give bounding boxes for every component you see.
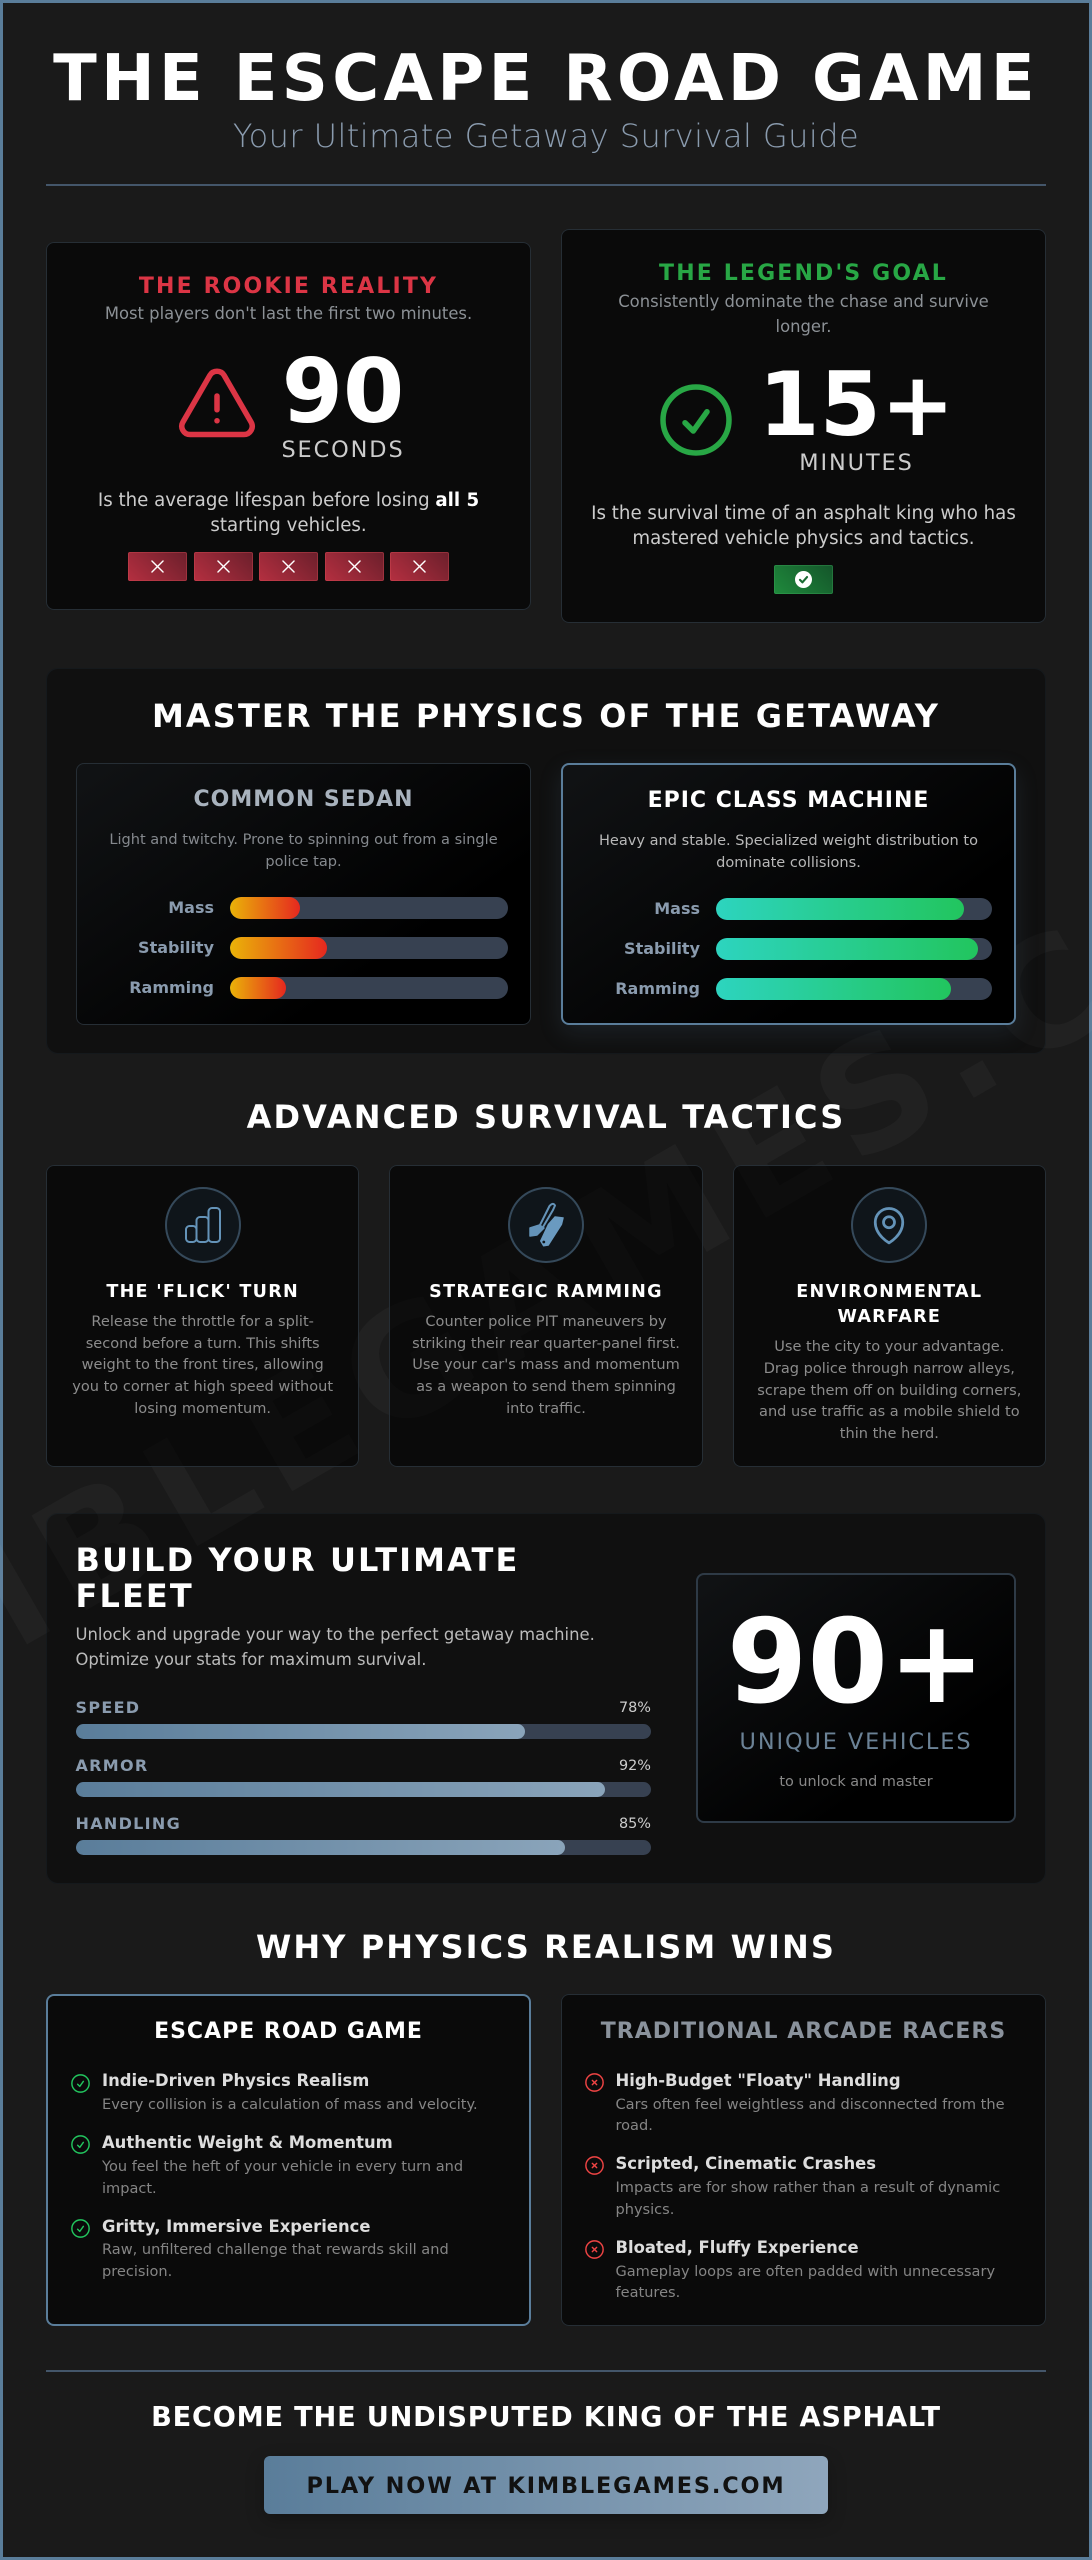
item description	[616, 2263, 995, 2301]
icon: bars	[165, 1187, 241, 1263]
item description: road.	[616, 2117, 653, 2134]
text: sedan description	[109, 831, 498, 870]
icon: check circle	[660, 384, 732, 456]
icon: wrench and screwdriver	[508, 1187, 584, 1263]
icon: surviving vehicle	[774, 565, 833, 594]
stat: armor: 92%	[619, 1758, 651, 1774]
text: flick turn: weight to the front tires, allowing	[82, 1356, 324, 1373]
heading: escape road game: ESCAPE ROAD GAME	[154, 2019, 423, 2044]
item title: Authentic Weight & Momentum	[102, 2133, 393, 2152]
text: legend description: mastered vehicle physics and tactics.	[632, 528, 975, 549]
stat row: ramming: Ramming	[129, 978, 214, 997]
heading: epic class machine: EPIC CLASS MACHINE	[648, 788, 929, 813]
heading: environmental warfare: ENVIRONMENTAL	[796, 1282, 982, 1302]
text: flick turn	[72, 1313, 333, 1417]
text: fleet description	[76, 1625, 595, 1669]
item description	[102, 2158, 463, 2197]
stat: speed: SPEED	[76, 1698, 140, 1717]
stat row: mass: Mass	[168, 898, 214, 917]
stat: handling: 85%	[619, 1816, 651, 1832]
list item: physics realism	[71, 2071, 478, 2113]
heading: fleet	[76, 1541, 519, 1615]
panel: master the physics	[46, 668, 1046, 1054]
text: flick turn: losing momentum.	[134, 1400, 271, 1417]
item description: physics.	[616, 2201, 674, 2218]
stat: handling: HANDLING	[76, 1814, 181, 1833]
stat unit: minutes: MINUTES	[799, 450, 914, 476]
stat row: mass	[654, 898, 992, 920]
stat: speed	[76, 1698, 651, 1739]
heading: environmental warfare	[796, 1282, 982, 1327]
heading: physics: MASTER THE PHYSICS OF THE GETAWAY	[152, 696, 940, 734]
stat: armor: ARMOR	[76, 1756, 149, 1775]
heading: traditional arcade racers: TRADITIONAL ARCADE RACERS	[601, 2019, 1006, 2044]
text: environmental warfare: scrape them off on building corners,	[757, 1382, 1021, 1399]
text: legend subtitle	[618, 292, 989, 336]
heading: legend's goal: THE LEGEND'S GOAL	[659, 261, 948, 286]
item description: Raw, unfiltered challenge that rewards skill and	[102, 2241, 449, 2258]
text: sedan description: Light and twitchy. Prone to spinning out from a single	[109, 831, 498, 848]
text: environmental warfare: Use the city to your advantage.	[774, 1338, 1004, 1355]
stat: armor	[76, 1756, 651, 1797]
text: strategic ramming: Counter police PIT maneuvers by	[425, 1313, 667, 1330]
text: strategic ramming: striking their rear quarter-panel first.	[412, 1335, 680, 1352]
text: fleet description: Unlock and upgrade your way to the perfect getaway machine.	[76, 1625, 595, 1644]
text: rookie description: Is the average lifespan before losing all 5	[98, 490, 479, 511]
lost vehicle 4	[324, 552, 384, 581]
text: environmental warfare: Drag police through narrow alleys,	[764, 1360, 1015, 1377]
icon: check	[71, 2219, 90, 2238]
text: environmental warfare: thin the herd.	[840, 1425, 939, 1442]
list item: cinematic crashes	[585, 2154, 1000, 2218]
stat row: ramming	[129, 977, 508, 999]
heading: fleet: FLEET	[76, 1577, 194, 1615]
button: play now	[264, 2456, 828, 2514]
panel: build your ultimate fleet	[46, 1513, 1046, 1884]
icon: check	[71, 2074, 90, 2093]
heading: common sedan: COMMON SEDAN	[194, 787, 413, 812]
stat: handling	[76, 1814, 651, 1855]
text: legend description	[591, 503, 1016, 549]
stat: 15+: 15+	[758, 353, 955, 456]
text: rookie description: starting vehicles.	[210, 515, 367, 536]
item description: features.	[616, 2284, 680, 2301]
text: legend subtitle: longer.	[776, 317, 831, 336]
icon: map pin	[851, 1187, 927, 1263]
label: unique vehicles: UNIQUE VEHICLES	[740, 1729, 972, 1755]
lost vehicle 2	[194, 552, 252, 581]
stat row: mass: Mass	[654, 899, 700, 918]
text: epic description: Heavy and stable. Specialized weight distribution to	[599, 832, 978, 849]
item description	[102, 2241, 449, 2280]
item description: Gameplay loops are often padded with unnecessary	[616, 2263, 995, 2280]
card: strategic ramming	[389, 1165, 703, 1467]
lost vehicle 5	[390, 552, 449, 581]
item description: Impacts are for show rather than a result of dynamic	[616, 2179, 1000, 2196]
list item: floaty handling	[585, 2070, 1005, 2134]
lost vehicle 1	[128, 552, 187, 581]
title: THE ESCAPE ROAD GAME	[53, 42, 1039, 116]
text: sedan description: police tap.	[265, 853, 342, 870]
text: flick turn: you to corner at high speed without	[72, 1378, 333, 1395]
item description: You feel the heft of your vehicle in every turn and	[102, 2158, 463, 2175]
text: strategic ramming: Use your car's mass and momentum	[412, 1356, 680, 1373]
button: play now: PLAY NOW AT KIMBLEGAMES.COM	[306, 2473, 786, 2499]
list item: weight and momentum	[71, 2133, 463, 2197]
text: environmental warfare	[757, 1338, 1021, 1442]
item description	[616, 2179, 1000, 2218]
text: strategic ramming: as a weapon to send them spinning	[416, 1378, 676, 1395]
icon: cross	[585, 2240, 604, 2259]
subtitle: Your Ultimate Getaway Survival Guide	[233, 117, 859, 155]
heading: advanced survival tactics: ADVANCED SURVIVAL TACTICS	[247, 1098, 845, 1136]
card: common sedan	[76, 763, 531, 1025]
heading: why physics realism wins: WHY PHYSICS REALISM WINS	[256, 1928, 836, 1966]
item title: High-Budget "Floaty" Handling	[616, 2070, 901, 2090]
text: legend subtitle: Consistently dominate the chase and survive	[618, 292, 989, 310]
heading: rookie reality: THE ROOKIE REALITY	[139, 274, 438, 299]
icon: five lost vehicles	[128, 552, 449, 581]
item description: Every collision is a calculation of mass and velocity.	[102, 2096, 478, 2113]
card: the flick turn	[46, 1165, 359, 1467]
text: flick turn: second before a turn. This shifts	[86, 1335, 320, 1352]
callout: 90+ unique vehicles	[696, 1573, 1016, 1823]
stat: 90+: 90+	[727, 1595, 985, 1730]
panel: the legend's goal	[561, 229, 1046, 623]
heading: strategic ramming: STRATEGIC RAMMING	[429, 1282, 663, 1302]
item title: Bloated, Fluffy Experience	[616, 2238, 859, 2257]
item title: Gritty, Immersive Experience	[102, 2217, 370, 2236]
item description: precision.	[102, 2263, 172, 2280]
heading: flick turn: THE 'FLICK' TURN	[106, 1282, 299, 1302]
text: flick turn: Release the throttle for a split-	[91, 1313, 314, 1330]
lost vehicle 3	[259, 552, 318, 581]
icon: warning triangle	[178, 368, 256, 438]
panel: the rookie reality	[46, 242, 531, 610]
item title: Scripted, Cinematic Crashes	[616, 2154, 876, 2173]
text: epic description	[599, 832, 978, 871]
item description: Cars often feel weightless and disconnected from the	[616, 2096, 1005, 2112]
text: rookie subtitle: Most players don't last the first two minutes.	[105, 304, 472, 323]
icon: cross	[585, 2073, 604, 2092]
stat unit: seconds: SECONDS	[281, 437, 405, 463]
item description: impact.	[102, 2180, 157, 2197]
stat row: stability: Stability	[624, 939, 700, 958]
text: fleet description: Optimize your stats for maximum survival.	[76, 1650, 426, 1669]
stat: 90: 90	[282, 340, 404, 443]
stat row: stability: Stability	[138, 938, 214, 957]
icon: check	[71, 2135, 90, 2154]
stat row: stability	[624, 938, 992, 960]
text: legend description: Is the survival time of an asphalt king who has	[591, 503, 1016, 524]
stat row: stability	[138, 937, 508, 959]
panel: escape road game comparison	[46, 1994, 531, 2326]
item description	[616, 2096, 1005, 2134]
text: epic description: dominate collisions.	[716, 854, 861, 871]
item title: Indie-Driven Physics Realism	[102, 2071, 369, 2090]
list item: immersive experience	[71, 2217, 449, 2280]
text: strategic ramming	[412, 1313, 680, 1417]
heading: call to action: BECOME THE UNDISPUTED KING OF THE ASPHALT	[151, 2402, 941, 2432]
heading: fleet: BUILD YOUR ULTIMATE	[76, 1541, 519, 1579]
text: rookie description	[98, 490, 479, 536]
stat row: ramming: Ramming	[615, 979, 700, 998]
icon: cross	[585, 2156, 604, 2175]
stat row: ramming	[615, 978, 992, 1000]
text: to unlock and master: to unlock and master	[779, 1774, 933, 1790]
card: environmental warfare	[733, 1165, 1046, 1467]
list item: fluffy experience	[585, 2238, 995, 2301]
stat row: mass	[168, 897, 508, 919]
text: strategic ramming: into traffic.	[506, 1400, 586, 1417]
card: epic class machine	[561, 763, 1016, 1025]
heading: environmental warfare: WARFARE	[837, 1307, 941, 1327]
text: environmental warfare: and use traffic as a mobile shield to	[759, 1403, 1020, 1420]
stat: speed: 78%	[619, 1700, 651, 1716]
panel: traditional arcade racers comparison	[561, 1994, 1046, 2326]
